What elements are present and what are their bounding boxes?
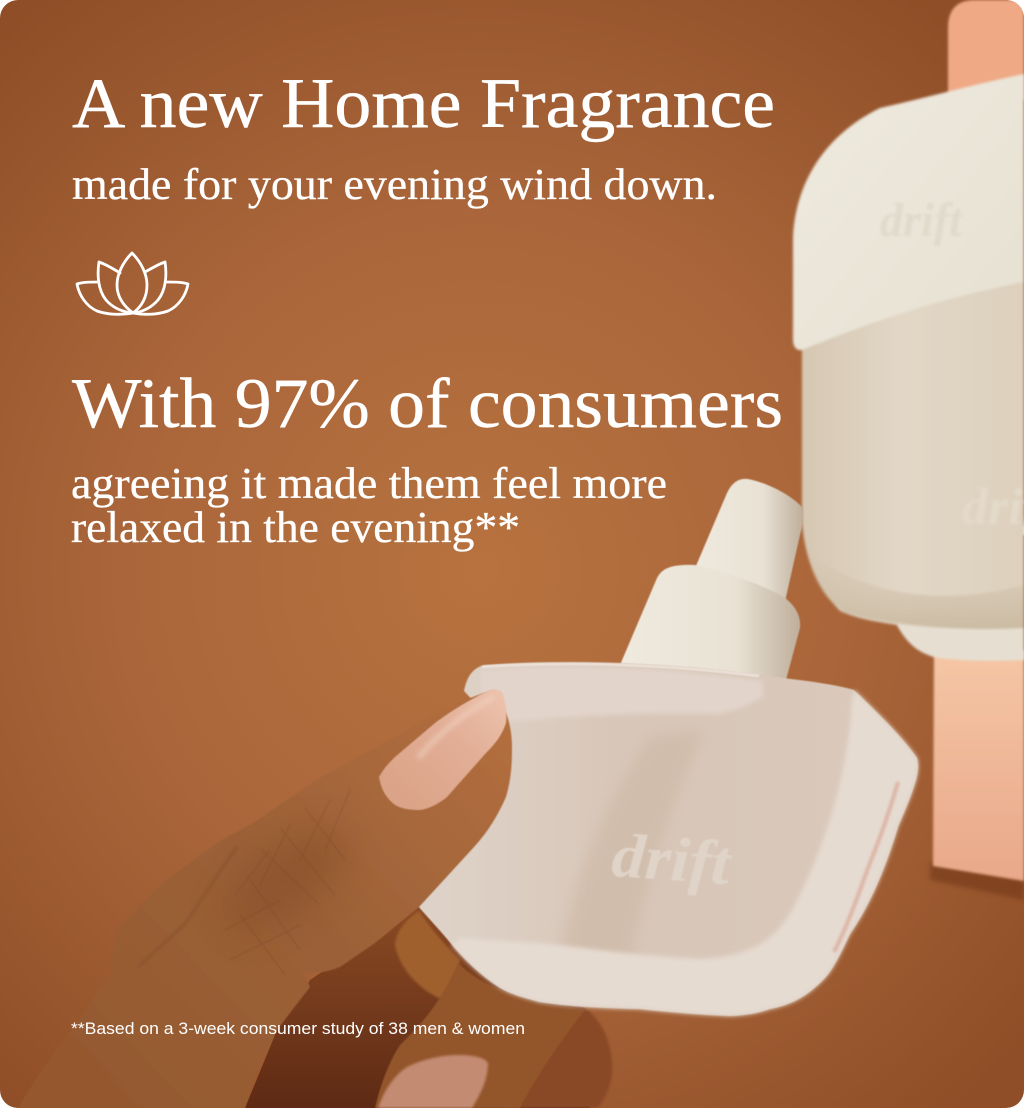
refill bottle xyxy=(418,479,918,1016)
icon: lotus xyxy=(77,253,188,314)
outlet plate: bottom xyxy=(933,650,1024,881)
bottle side groove xyxy=(834,782,898,952)
nozzle top xyxy=(696,478,802,599)
hand: rear fingers xyxy=(245,905,612,1108)
thumb shape xyxy=(18,690,512,1108)
diffuser cap xyxy=(793,74,1024,350)
hand: thumb xyxy=(18,690,512,1108)
bottle brand emboss: drift xyxy=(610,822,734,898)
outlet plate shadow xyxy=(930,862,1024,900)
outlet plate: top xyxy=(948,0,1024,100)
bottle upper band xyxy=(498,666,763,719)
right finger xyxy=(519,1006,612,1108)
stat description: relaxed in the evening** xyxy=(71,503,520,552)
bottle shell xyxy=(418,662,918,1016)
dark palm xyxy=(245,905,590,1108)
stat description: agreeing it made them feel more xyxy=(71,459,667,508)
stat description xyxy=(71,459,667,552)
diffuser body lower shade xyxy=(812,569,1024,630)
knuckle shading xyxy=(236,832,340,923)
knuckle shadow xyxy=(225,791,350,960)
finger crease xyxy=(138,847,237,967)
nozzle base xyxy=(620,565,800,680)
stat heading: With 97% of consumers xyxy=(72,365,783,443)
diffuser body xyxy=(802,275,1024,629)
bottle light streak xyxy=(562,734,698,952)
bottle lower lip and right bevel xyxy=(452,690,918,1016)
thumbnail xyxy=(379,690,506,810)
subtitle: made for your evening wind down. xyxy=(72,160,717,209)
index finger xyxy=(375,963,585,1108)
plug-in diffuser xyxy=(793,74,1024,661)
lower fingernail xyxy=(378,1055,488,1108)
thumbnail highlight xyxy=(418,697,494,758)
bottle rim highlight xyxy=(482,664,759,676)
title: A new Home Fragrance xyxy=(72,65,775,143)
skin wrinkles xyxy=(261,791,350,944)
middle finger xyxy=(395,911,460,1000)
footnote: **Based on a 3-week consumer study of 38 men & women xyxy=(71,1019,525,1038)
diffuser ring xyxy=(896,623,1024,662)
diffuser brand emboss, cap: drift xyxy=(880,194,964,247)
